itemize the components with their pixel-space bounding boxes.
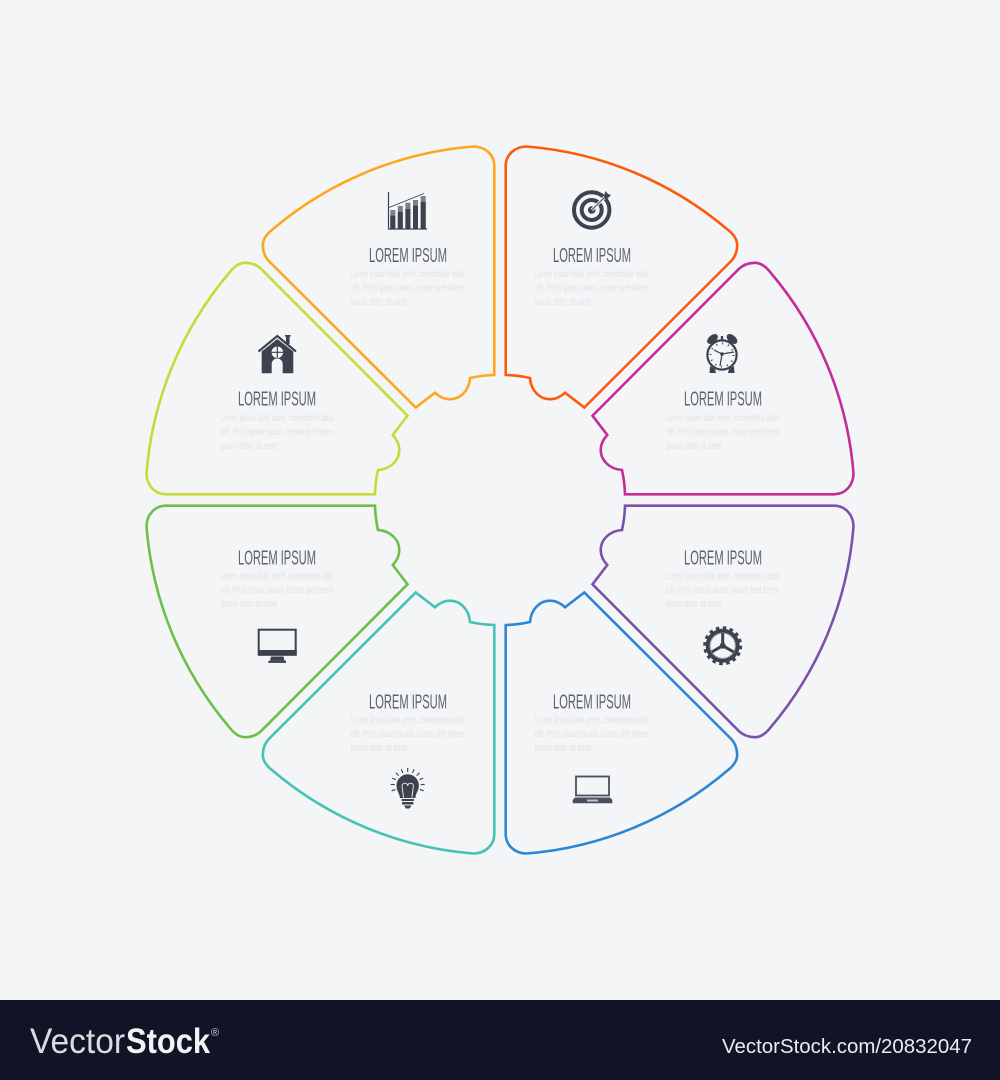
text block: elit. Proin ipsum purus, euism pret lorem [351,729,464,740]
text block: ipsum dolor sit amet [221,441,277,452]
heading: LOREM IPSUM [369,690,447,714]
text block [351,715,464,754]
icon: rising bar chart [388,192,427,229]
text block: elit. Proin ipsum purus, euism pret lorem [666,427,779,438]
outline: orange segment [506,146,737,408]
panel: bottom left, light bulb [263,592,494,854]
heading: LOREM IPSUM [684,388,762,410]
icon: house [258,335,296,373]
panel: right upper, alarm clock [592,263,854,494]
text block [535,715,648,754]
text block: Lorem ipsum dolor amet, consectetur adipi [221,571,334,582]
icon: gear [705,628,740,663]
text block [221,413,334,452]
text block: Lorem ipsum dolor amet, consectetur adipi [351,715,464,726]
text block: Lorem ipsum dolor amet, consectetur adipi [666,413,779,424]
icon: laptop [573,776,612,803]
text block: Lorem ipsum dolor amet, consectetur adipi [535,715,648,726]
footer logo: Stock [126,1021,210,1061]
text block: elit. Proin ipsum purus, euism pret lorem [351,283,464,294]
text block [221,571,334,610]
icon: light bulb [391,768,425,808]
outline: green segment [146,506,408,737]
footer logo: Vector [30,1021,125,1061]
text block [535,269,648,308]
heading: LOREM IPSUM [684,546,762,570]
text block: ipsum dolor sit amet [351,743,407,754]
text block: elit. Proin ipsum purus, euism pret lorem [535,283,648,294]
text block: ipsum dolor sit amet [351,297,407,308]
text block [666,571,779,610]
footer logo: ® [211,1027,219,1039]
text block: elit. Proin ipsum purus, euism pret lorem [221,585,334,596]
panel: left upper, house [146,263,408,494]
heading: LOREM IPSUM [369,244,447,267]
heading: LOREM IPSUM [238,388,316,410]
text block: Lorem ipsum dolor amet, consectetur adipi [351,269,464,280]
text block [666,413,779,452]
panel: right lower, gear [592,506,854,737]
text block: ipsum dolor sit amet [666,599,722,610]
text block: ipsum dolor sit amet [535,297,591,308]
text block: Lorem ipsum dolor amet, consectetur adipi [666,571,779,582]
text block: elit. Proin ipsum purus, euism pret lorem [666,585,779,596]
panel: left lower, monitor [146,506,408,737]
text block: ipsum dolor sit amet [221,599,277,610]
outline: amber segment [263,146,494,408]
outline: teal segment [263,592,494,854]
panel: top left, bar chart [263,146,494,408]
text block [351,269,464,308]
text block: Lorem ipsum dolor amet, consectetur adipi [535,269,648,280]
outline: lime segment [146,263,408,494]
text block: ipsum dolor sit amet [666,441,722,452]
heading: LOREM IPSUM [553,690,631,714]
icon: desktop monitor [258,630,297,663]
text block: ipsum dolor sit amet [535,743,591,754]
footer bar [0,1000,1000,1080]
panel: bottom right, laptop [506,592,737,854]
heading: LOREM IPSUM [238,546,316,570]
outline: purple segment [592,506,854,737]
text block: Lorem ipsum dolor amet, consectetur adipi [221,413,334,424]
text block: elit. Proin ipsum purus, euism pret lorem [221,427,334,438]
text block: elit. Proin ipsum purus, euism pret lorem [535,729,648,740]
outline: magenta segment [592,263,854,494]
icon: alarm clock [705,332,739,373]
footer url: VectorStock.com/20832047 [722,1036,972,1058]
heading: LOREM IPSUM [553,244,631,267]
panel: top right, target [506,146,737,408]
icon: target with arrow [574,191,611,228]
outline: blue segment [506,592,737,854]
